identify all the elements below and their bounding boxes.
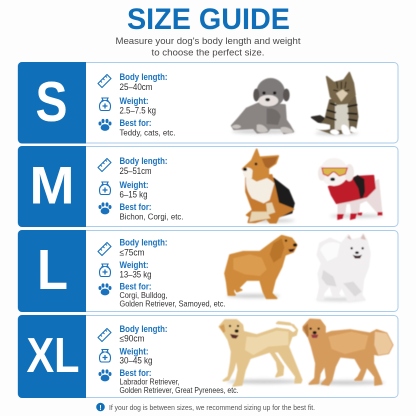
details text M: 6–15 kg <box>120 190 148 200</box>
details text S: Teddy, cats, etc. <box>120 128 176 138</box>
photo: dog in red sweater <box>318 158 383 220</box>
icon: info <box>96 403 105 412</box>
icon: weight bag <box>100 98 110 110</box>
details text L: Golden Retriever, Samoyed, etc. <box>120 300 226 308</box>
details text XL: Labrador Retriever, <box>120 378 180 386</box>
photo: corgi <box>243 149 295 223</box>
icon: weight bag <box>100 182 110 194</box>
size letter XL: XL <box>26 329 80 383</box>
details text L: Body length: <box>120 238 168 248</box>
details text M: Weight: <box>120 180 149 190</box>
subtitle: to choose the perfect size. <box>152 48 264 58</box>
size letter L: L <box>37 238 68 302</box>
details text L: 13–35 kg <box>120 270 152 280</box>
icon: ruler <box>98 242 111 256</box>
details text M: Best for: <box>120 202 152 212</box>
footnote <box>96 403 315 412</box>
photo: tabby cat <box>312 73 358 135</box>
panel: size S <box>18 62 398 144</box>
details text M: Body length: <box>120 156 168 166</box>
panel: size L <box>18 230 398 312</box>
icon: paw <box>98 283 112 295</box>
details text L <box>120 238 226 308</box>
details text M: Bichon, Corgi, etc. <box>120 212 184 222</box>
details text S: Weight: <box>120 96 149 106</box>
icon: paw <box>98 369 112 381</box>
icon: ruler <box>98 74 111 88</box>
icon: paw <box>98 202 112 214</box>
details text L: ≤75cm <box>120 248 144 258</box>
icon: paw <box>98 119 112 131</box>
details text XL: Weight: <box>120 346 149 356</box>
details text XL: 30–45 kg <box>120 356 153 366</box>
icon: ruler <box>98 328 111 342</box>
icon: weight bag <box>100 350 110 362</box>
details text S <box>120 72 176 138</box>
panel: size M <box>18 146 398 227</box>
details text XL <box>120 324 238 395</box>
details text XL: ≤90cm <box>120 334 144 344</box>
icon: weight bag <box>100 264 110 276</box>
icon: ruler <box>98 158 111 172</box>
size letter S: S <box>36 70 68 134</box>
details text S: 2.5–7.5 kg <box>120 106 156 116</box>
photo: gray poodle <box>232 78 295 134</box>
photo: golden retriever <box>225 236 297 298</box>
details text M <box>120 156 184 222</box>
subtitle: Measure your dog's body length and weight <box>116 36 301 46</box>
photo: samoyed <box>317 234 370 302</box>
footnote text: If your dog is between sizes, we recommend sizing up for the best fit. <box>109 403 315 412</box>
details text S: Body length: <box>120 72 168 82</box>
details text S: Best for: <box>120 118 152 128</box>
title: SIZE GUIDE <box>127 3 290 36</box>
details text XL: Body length: <box>120 324 168 334</box>
details text L: Weight: <box>120 260 149 270</box>
details text S: 25–40cm <box>120 82 152 92</box>
panel: size XL <box>18 315 398 398</box>
subtitle <box>116 36 301 58</box>
details text L: Best for: <box>120 282 152 292</box>
photo: labrador <box>219 320 302 386</box>
size letter M: M <box>30 156 74 216</box>
details text M: 25–51cm <box>120 166 152 176</box>
icon: info: ! <box>99 403 102 412</box>
details text L: Corgi, Bulldog, <box>120 291 168 300</box>
details text XL: Best for: <box>120 368 152 378</box>
details text XL: Golden Retriever, Great Pyrenees, etc. <box>120 386 238 395</box>
photo: golden retriever long coat <box>303 319 393 385</box>
